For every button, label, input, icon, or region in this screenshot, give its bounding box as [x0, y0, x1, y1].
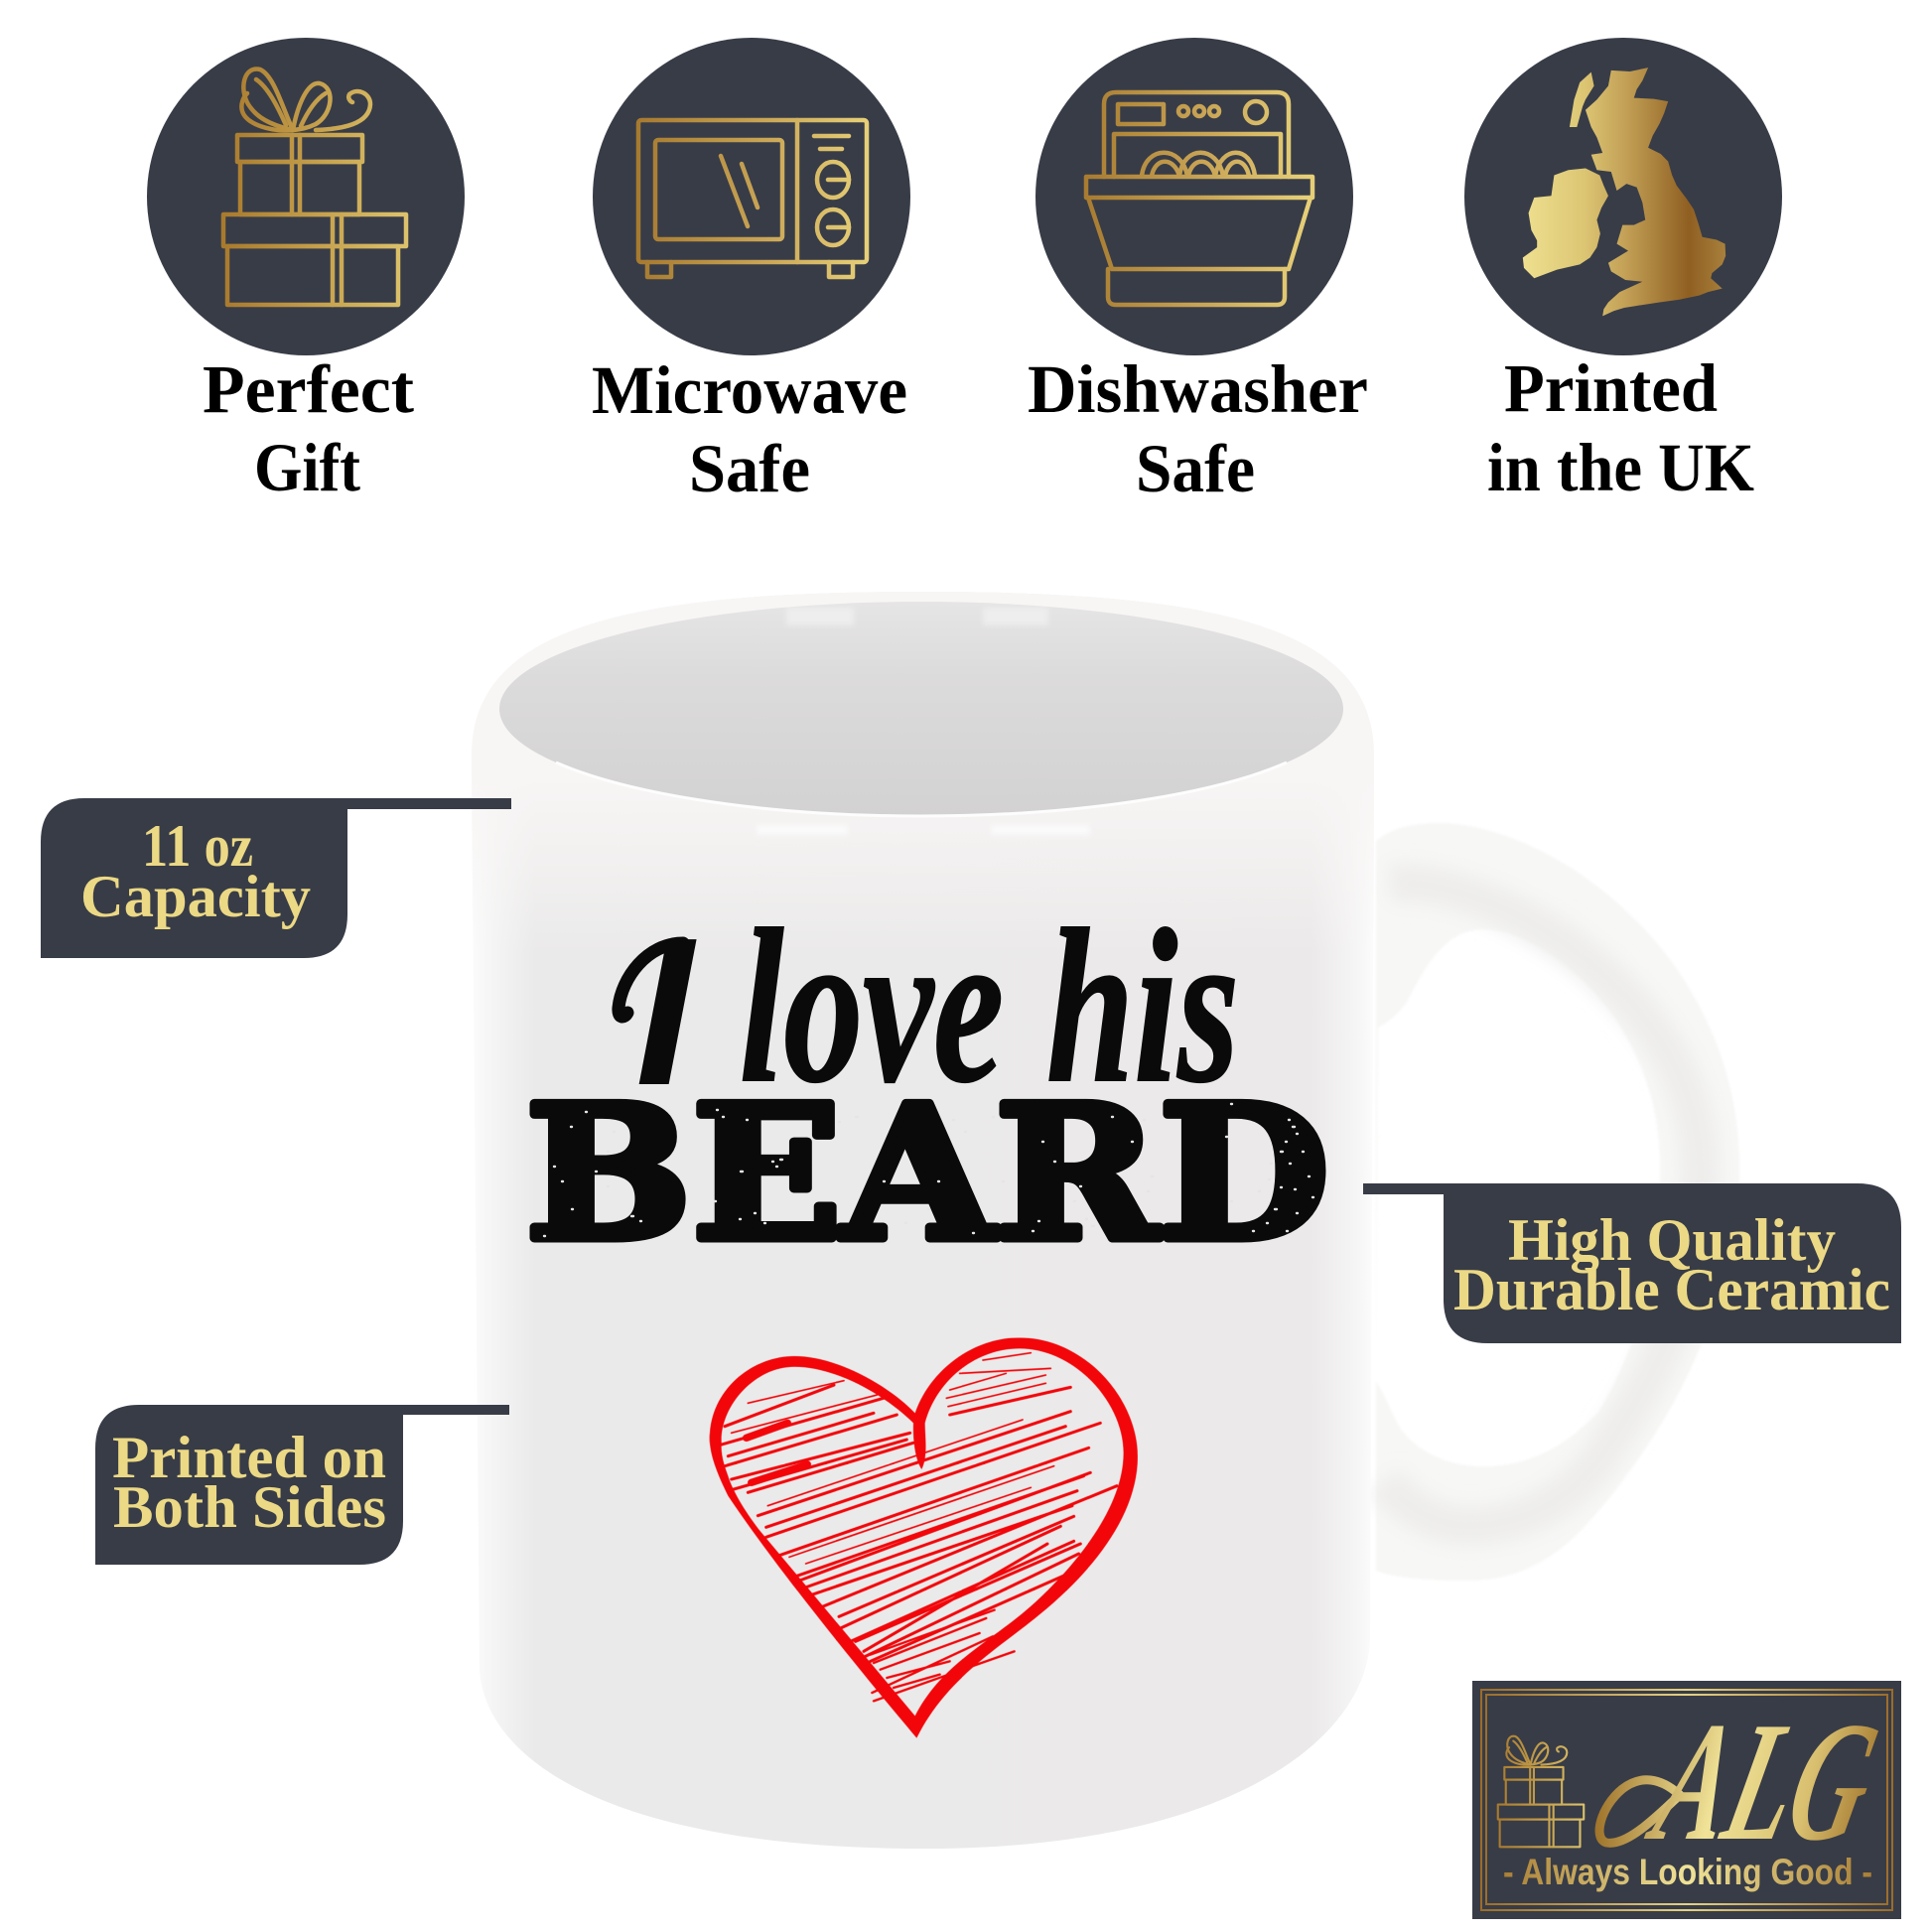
callout: high quality durable ceramic: High Quality [1508, 1207, 1836, 1273]
label: Perfect Gift: Perfect [203, 351, 414, 427]
logo tagline: - Always Looking Good - [1503, 1852, 1872, 1892]
mug inner opening [499, 602, 1343, 816]
label: Perfect Gift: Gift [254, 430, 360, 505]
icon: perfect gift [147, 38, 465, 355]
callout: 11 oz capacity: 11 oz [142, 813, 253, 879]
mug inner lip highlight [556, 762, 1287, 816]
mug artwork: scribbled red heart [710, 1337, 1138, 1738]
logo: Always Looking Good [1472, 1681, 1901, 1919]
mug slogan: I love his: I [635, 894, 697, 1129]
mug body [472, 592, 1374, 1849]
label: Printed in the UK: Printed [1504, 350, 1718, 426]
callout: printed on both sides: Both Sides [113, 1474, 386, 1540]
label: Perfect Gift [203, 351, 414, 505]
icon: UK map [1464, 38, 1782, 355]
label: Microwave Safe [592, 352, 907, 506]
callout: high quality durable ceramic [1363, 1183, 1901, 1343]
callout: printed on both sides: Printed on [112, 1425, 386, 1490]
callout: 11 oz capacity [41, 798, 511, 958]
label: Dishwasher Safe: Safe [1136, 431, 1255, 506]
label: Printed in the UK [1487, 350, 1754, 505]
label: Microwave Safe: Microwave [592, 352, 907, 428]
callout: 11 oz capacity: Capacity [80, 864, 311, 929]
mug slogan: I love his: love [740, 885, 1004, 1129]
logo gift icon [1498, 1736, 1584, 1847]
mug handle [1376, 823, 1739, 1581]
label: Printed in the UK: in the UK [1487, 430, 1754, 505]
label: Dishwasher Safe: Dishwasher [1028, 351, 1368, 427]
mug rim highlights [757, 608, 1090, 835]
label: Dishwasher Safe [1028, 351, 1368, 506]
label: Microwave Safe: Safe [689, 431, 810, 506]
mug slogan: I love his [619, 885, 1239, 1129]
mug slogan: I love his: his [1046, 885, 1239, 1129]
icon: microwave safe [593, 38, 910, 355]
callout: high quality durable ceramic: Durable Ceramic [1453, 1257, 1890, 1322]
mug slogan: BEARD: BEARD [525, 1064, 1329, 1282]
callout: printed on both sides [95, 1405, 509, 1565]
icon: dishwasher safe [1035, 38, 1353, 355]
